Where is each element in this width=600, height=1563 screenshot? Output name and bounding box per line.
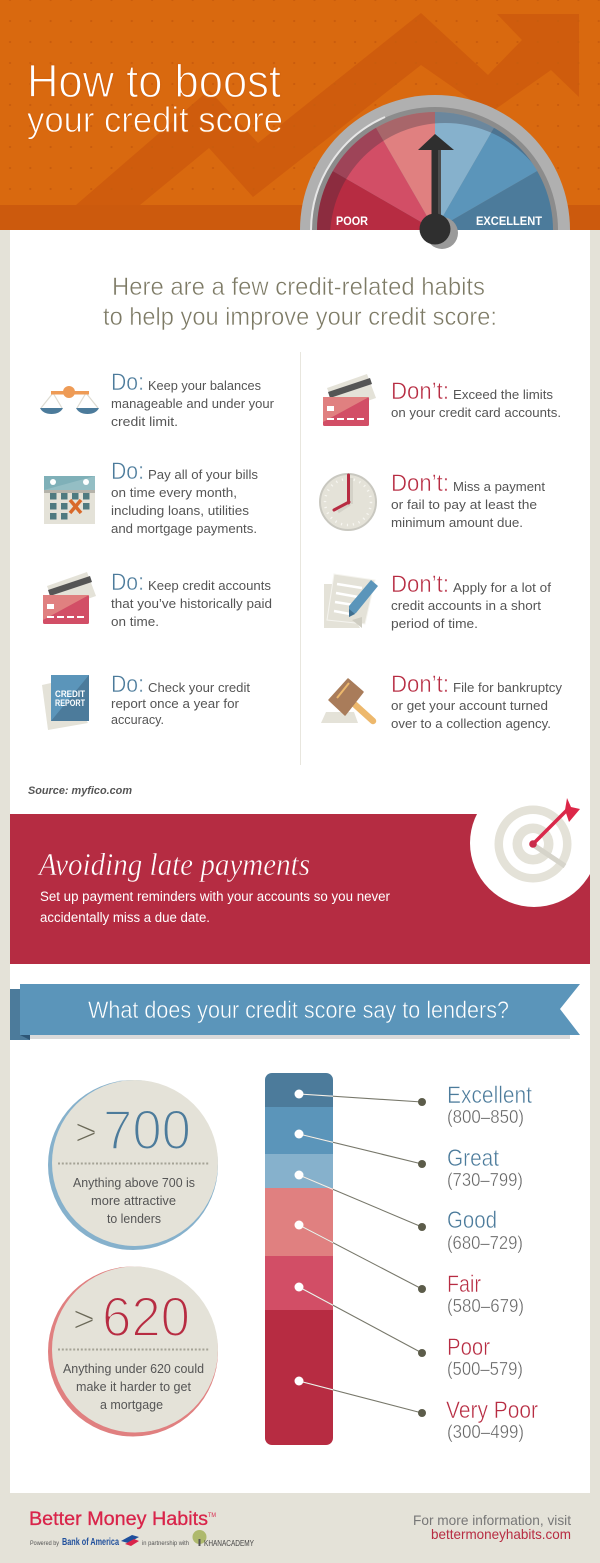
item: do 1: Do: — [111, 369, 144, 396]
score label: good: (680–729) — [447, 1233, 523, 1253]
ribbon heading — [10, 984, 580, 1040]
intro heading: to help you improve your credit score: — [103, 303, 497, 331]
footer link: For more information, visit — [413, 1512, 571, 1528]
item: don't 4: or get your account turned — [391, 698, 548, 713]
label: excellent: EXCELLENT — [476, 216, 542, 228]
icon: credit report: CREDIT — [55, 689, 85, 700]
ribbon heading: What does your credit score say to lenders? — [88, 997, 509, 1024]
score label: great: Great — [447, 1145, 499, 1172]
icon: credit report — [42, 675, 89, 730]
source note: Source: myfico.com — [28, 785, 132, 797]
divider — [300, 352, 301, 765]
icon: gavel — [321, 679, 373, 723]
item: do 3 — [111, 569, 272, 629]
icon: flag — [121, 1535, 139, 1546]
stat circle: above 700: to lenders — [107, 1212, 161, 1226]
needle hub — [420, 214, 458, 249]
icon: credit cards — [323, 374, 376, 426]
credit score gauge — [300, 95, 570, 249]
stat circle: under 620 — [48, 1266, 218, 1436]
icon: calendar — [44, 476, 95, 524]
title: How to boost — [27, 55, 281, 107]
score label: fair — [447, 1271, 524, 1316]
score label: poor: (500–579) — [447, 1359, 523, 1379]
footer branding — [29, 1508, 255, 1548]
footer branding: Powered by — [30, 1540, 60, 1547]
stat circle: under 620: a mortgage — [100, 1398, 163, 1412]
item: do 4: accuracy. — [111, 712, 164, 727]
header banner — [0, 0, 600, 230]
item: don't 2 — [391, 470, 545, 530]
item: do 1: manageable and under your — [111, 396, 275, 411]
item: do 3: Do: — [111, 569, 144, 596]
footer link — [413, 1512, 571, 1542]
stat circle: under 620: Anything under 620 could — [63, 1362, 204, 1376]
item: don't 3: Don’t: — [391, 571, 449, 598]
score label: poor: Poor — [447, 1334, 490, 1361]
stat circle: under 620: > — [73, 1299, 95, 1341]
item: do 4 — [111, 671, 250, 727]
panel: avoiding late payments — [10, 798, 590, 964]
stat circle: above 700: > — [75, 1112, 97, 1154]
item: do 3: on time. — [111, 614, 159, 629]
title: your credit score — [27, 99, 283, 140]
item: don't 4: File for bankruptcy — [453, 680, 563, 695]
footer branding: KHANACADEMY — [204, 1539, 255, 1548]
callout text: accidentally miss a due date. — [40, 910, 210, 925]
item: do 3: that you’ve historically paid — [111, 596, 272, 611]
footer link: bettermoneyhabits.com — [431, 1526, 571, 1542]
score scale bar — [265, 1073, 333, 1445]
icon: credit cards — [43, 572, 96, 624]
item: do 2 — [111, 458, 258, 536]
stat circle: under 620: 620 — [102, 1285, 190, 1348]
item: don't 2: or fail to pay at least the — [391, 497, 537, 512]
item: don't 1: Don’t: — [391, 378, 449, 405]
intro heading — [103, 273, 497, 331]
label: poor: POOR — [336, 216, 369, 228]
score label: excellent — [447, 1082, 532, 1127]
item: don't 2: Miss a payment — [453, 479, 545, 494]
item: don't 4: Don’t: — [391, 671, 449, 698]
white content panel — [10, 230, 590, 1493]
item: don't 3: Apply for a lot of — [453, 580, 551, 595]
icon: scales — [40, 386, 99, 414]
footer branding: Bank of America — [62, 1537, 119, 1548]
item: don't 3: period of time. — [391, 616, 478, 631]
footer branding: TM — [208, 1513, 216, 1519]
score label: poor — [447, 1334, 523, 1379]
item: do 2: Do: — [111, 458, 144, 485]
item: don't 4: over to a collection agency. — [391, 716, 551, 731]
score label: great — [447, 1145, 523, 1190]
item: don't 2: minimum amount due. — [391, 515, 523, 530]
callout text — [40, 889, 390, 925]
score connectors — [294, 1090, 426, 1417]
callout heading: Avoiding late payments — [37, 846, 310, 882]
item: do 2: including loans, utilities — [111, 503, 250, 518]
score label: good — [447, 1207, 523, 1253]
stat circle: above 700 — [48, 1080, 218, 1250]
score label: fair: (580–679) — [447, 1296, 524, 1316]
icon: paper and pencil — [324, 574, 378, 628]
footer branding: Better Money Habits — [29, 1508, 208, 1530]
item: do 4: Do: — [111, 671, 144, 698]
icon: clock — [320, 474, 376, 530]
item: do 2: and mortgage payments. — [111, 521, 257, 536]
item: do 1 — [111, 369, 275, 429]
item: do 4: report once a year for — [111, 696, 240, 711]
item: don't 1 — [391, 378, 561, 420]
stat circle: above 700: more attractive — [91, 1194, 176, 1208]
item: don't 3: credit accounts in a short — [391, 598, 541, 613]
item: do 2: Pay all of your bills — [148, 467, 258, 482]
score label: excellent: Excellent — [447, 1082, 532, 1109]
score label: very poor: (300–499) — [447, 1422, 524, 1442]
score label: excellent: (800–850) — [447, 1107, 524, 1127]
score label: very poor: Very Poor — [446, 1397, 538, 1424]
item: don't 4 — [391, 671, 563, 731]
icon: credit report: REPORT — [55, 698, 85, 709]
intro heading: Here are a few credit-related habits — [112, 273, 485, 301]
item: do 3: Keep credit accounts — [148, 578, 272, 593]
item: don't 1: Exceed the limits — [453, 387, 554, 402]
icon: target — [470, 798, 590, 907]
score label: very poor — [446, 1397, 538, 1442]
score label: good: Good — [447, 1207, 497, 1234]
item: don't 3 — [391, 571, 551, 631]
title — [27, 55, 283, 140]
item: don't 2: Don’t: — [391, 470, 449, 497]
item: do 1: Keep your balances — [148, 378, 261, 393]
icon: tree — [192, 1530, 206, 1546]
item: do 2: on time every month, — [111, 485, 237, 500]
callout text: Set up payment reminders with your accounts so you never — [40, 889, 390, 904]
item: don't 1: on your credit card accounts. — [391, 405, 561, 420]
score label: great: (730–799) — [447, 1170, 523, 1190]
stat circle: under 620: make it harder to get — [76, 1380, 192, 1394]
stat circle: above 700: 700 — [103, 1098, 191, 1161]
item: do 4: Check your credit — [148, 680, 250, 695]
needle — [418, 134, 454, 223]
score label: fair: Fair — [447, 1271, 481, 1298]
stat circle: above 700: Anything above 700 is — [73, 1176, 195, 1190]
footer branding: in partnership with — [142, 1540, 189, 1547]
item: do 1: credit limit. — [111, 414, 178, 429]
